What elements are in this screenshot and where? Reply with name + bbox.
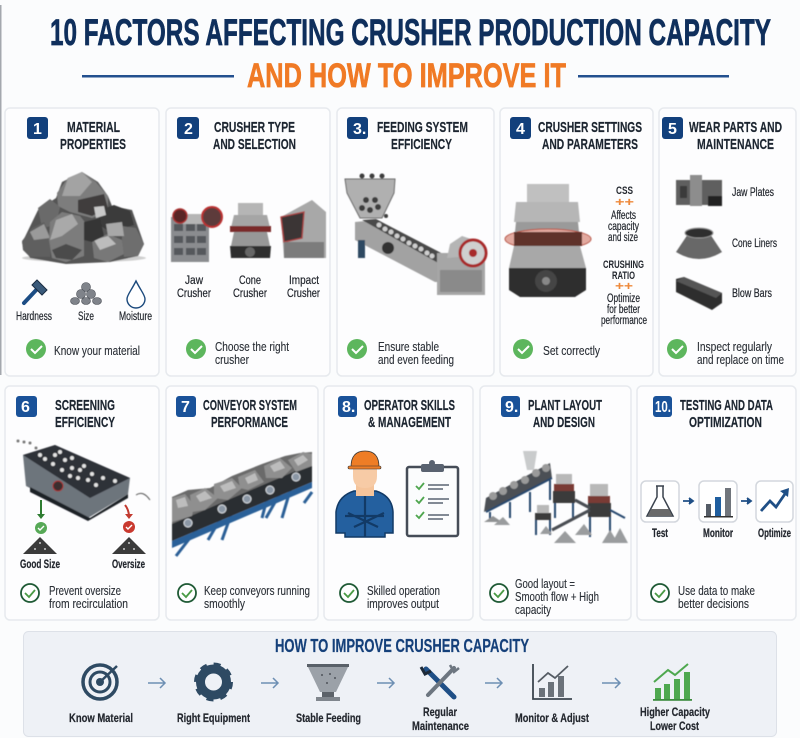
takeaway 2: Choose the right [215,339,289,354]
step: higher capacity lower cost [640,664,710,733]
image: jaw plates [676,175,722,206]
number badge 6 [16,396,37,417]
factor labels: Hardness [16,311,52,323]
number badge 7 [176,396,196,417]
crusher labels: Crusher [287,288,320,300]
step: monitor and adjust: Monitor & Adjust [515,713,589,725]
icon: flask [641,481,679,522]
heading 8: OPERATOR SKILLS [364,397,455,414]
panel: how to improve [24,632,776,736]
icon: size stones [70,282,102,304]
heading 2: AND SELECTION [213,136,296,153]
step: know material: Know Material [69,713,133,725]
takeaway 4: Set correctly [543,343,600,358]
heading 9 [528,397,602,431]
takeaway 8 [367,583,440,611]
CSS note [608,185,639,244]
icon: check [186,339,206,359]
arrow [261,678,278,688]
image: crushing plant [484,451,628,543]
crushing ratio note: performance [601,315,647,327]
takeaway 2: crusher [215,352,250,367]
arrow [683,498,693,504]
takeaway 9: capacity [515,602,551,617]
heading 3 [377,119,468,153]
number badge 7: 7 [181,399,190,416]
image: rock pile [22,172,146,264]
crusher labels: Impact [289,275,320,287]
panel: 2 crusher type [166,108,330,376]
crusher labels: Crusher [233,288,267,300]
heading 3: EFFICIENCY [391,136,452,153]
takeaway 1: Know your material [54,343,140,358]
takeaway 2 [215,339,289,367]
heading 4: AND PARAMETERS [542,136,638,153]
image: vibrating screen [16,440,150,521]
CSS note: and size [608,232,638,244]
icon: water drop [127,281,145,308]
takeaway 3: and even feeding [378,352,454,367]
number badge 10: 10. [655,399,671,416]
CSS note: CSS [616,185,633,197]
crushing ratio note: for better [607,304,640,316]
panel heading: HOW TO IMPROVE CRUSHER CAPACITY [275,636,529,656]
number badge 8: 8. [342,399,355,416]
number badge 4 [510,117,531,139]
image: jaw crusher [171,207,222,262]
good size outcome [23,500,57,554]
wear part labels: Jaw Plates [732,187,774,199]
number badge 4: 4 [516,121,525,138]
heading 1: PROPERTIES [60,136,126,153]
takeaway 7: smoothly [204,596,245,611]
wear part labels [732,187,777,300]
number badge 3: 3. [353,121,366,138]
step: regular maintenance: Regular [423,707,457,719]
icon: bar chart [699,481,737,522]
arrow [485,678,502,688]
heading 8 [364,397,455,431]
number badge 8 [338,396,357,417]
step: right equipment [177,665,250,725]
arrow [377,678,394,688]
takeaway 8: improves output [367,596,439,611]
image: hopper, feeder and jaw crusher [345,174,486,295]
crushing ratio note: RATIO [612,270,635,282]
arrow [148,678,165,688]
factor labels: Moisture [119,311,152,323]
heading 1: MATERIAL [67,119,120,136]
heading 6: EFFICIENCY [55,414,115,431]
icon: check outline [340,584,358,602]
panel: 3 feeding system [337,108,494,376]
number badge 1: 1 [33,121,42,138]
takeaway 3 [378,339,454,367]
heading 7: PERFORMANCE [211,414,288,431]
CSS note: ++ [615,195,634,209]
panel: 9 plant layout [480,386,631,620]
factor labels: Size [78,311,94,323]
image: cone crusher with highlighted chamber [505,184,591,297]
step: regular maintenance [412,665,469,733]
heading 4 [538,119,642,153]
step labels: Test [652,528,668,540]
takeaway 5: Inspect regularly [697,339,772,354]
number badge 9 [501,396,520,417]
heading 10: OPTIMIZATION [689,414,762,431]
takeaway 3: Ensure stable [378,339,439,354]
crushing ratio note: CRUSHING [603,259,644,271]
heading 7: CONVEYOR SYSTEM [203,397,297,414]
step: higher capacity lower cost: Lower Cost [650,721,699,733]
takeaway 10 [678,583,755,611]
crusher labels: Cone [239,275,261,287]
takeaway 9: Smooth flow + High [515,589,599,604]
heading 1 [60,119,126,153]
heading 8: & MANAGEMENT [368,414,451,431]
takeaway 7: Keep conveyors running [204,583,310,598]
heading 3: FEEDING SYSTEM [377,119,468,136]
icon: clipboard checklist [407,460,458,536]
subtitle: AND HOW TO IMPROVE IT [247,57,566,95]
image: impact crusher [281,200,326,258]
size labels: Oversize [112,559,145,571]
step labels [652,528,791,540]
step: stable feeding: Stable Feeding [296,713,361,725]
icon: trend line [756,481,793,522]
heading 9: AND DESIGN [533,414,595,431]
takeaway 7 [204,583,310,611]
heading 2: CRUSHER TYPE [214,119,295,136]
factor labels [16,311,152,323]
number badge 3 [347,117,368,139]
heading 9: PLANT LAYOUT [528,397,602,414]
crushing ratio note: Optimize [607,293,640,305]
takeaway 6 [49,583,128,611]
number badge 2 [177,117,199,139]
takeaway 6: from recirculation [49,596,128,611]
icon: check [347,339,367,359]
number badge 10 [653,396,672,417]
heading 5 [689,119,782,153]
oversize outcome [112,505,146,554]
icon: check outline [651,584,669,602]
number badge 5 [662,117,683,139]
image: cone liner [676,228,722,259]
icon: check [667,339,687,359]
step: know material [69,665,133,725]
step: right equipment: Right Equipment [177,713,250,725]
crushing ratio note [601,259,647,327]
crusher labels [177,275,320,300]
panel: 7 conveyor [166,386,318,620]
number badge 5: 5 [668,121,677,138]
crushing ratio note: ++ [615,279,633,293]
icon: check outline [490,584,508,602]
takeaway 5 [697,339,784,367]
heading 6 [55,397,115,431]
panel: 4 crusher settings [500,108,653,376]
step: regular maintenance: Maintenance [412,721,469,733]
icon: check [26,339,46,359]
takeaway 10: better decisions [678,596,749,611]
wear part labels: Blow Bars [732,288,772,300]
takeaway 8: Skilled operation [367,583,440,598]
step: higher capacity lower cost: Higher Capacity [640,707,710,719]
heading 6: SCREENING [55,397,115,414]
arrow [602,678,620,688]
icon: check outline [21,584,39,602]
icon: check outline [178,584,196,602]
arrow [741,498,751,504]
number badge 1 [27,117,48,139]
heading 2 [213,119,296,153]
step: stable feeding [296,664,361,725]
icon: hammer [24,280,47,303]
wear part labels: Cone Liners [732,238,777,250]
step labels: Monitor [703,528,733,540]
takeaway 9 [515,576,599,617]
takeaway 6: Prevent oversize [49,583,121,598]
panel: 1 material properties [5,108,159,376]
crusher labels: Crusher [177,288,211,300]
step: monitor and adjust [515,664,589,725]
size labels [20,559,145,571]
number badge 2: 2 [184,121,193,138]
CSS note: capacity [608,221,639,233]
CSS note: Affects [611,210,636,222]
panel: 5 wear parts [659,108,796,376]
panel: 6 screening [5,386,159,620]
panel: 10 testing and data [637,386,796,620]
takeaway 10: Use data to make [678,583,755,598]
number badge 9: 9. [505,399,518,416]
number badge 6: 6 [21,399,30,416]
takeaway 9: Good layout = [515,576,575,591]
image: belt conveyor [172,452,312,556]
image: cone crusher [230,203,271,258]
heading 4: CRUSHER SETTINGS [538,119,642,136]
size labels: Good Size [20,559,60,571]
image: blow bar [676,277,722,310]
crusher labels: Jaw [185,275,204,287]
panel: 8 operator [324,386,473,620]
icon: check [513,339,533,359]
heading 10 [680,397,773,431]
icon: worker [336,451,393,537]
heading 7 [203,397,297,431]
